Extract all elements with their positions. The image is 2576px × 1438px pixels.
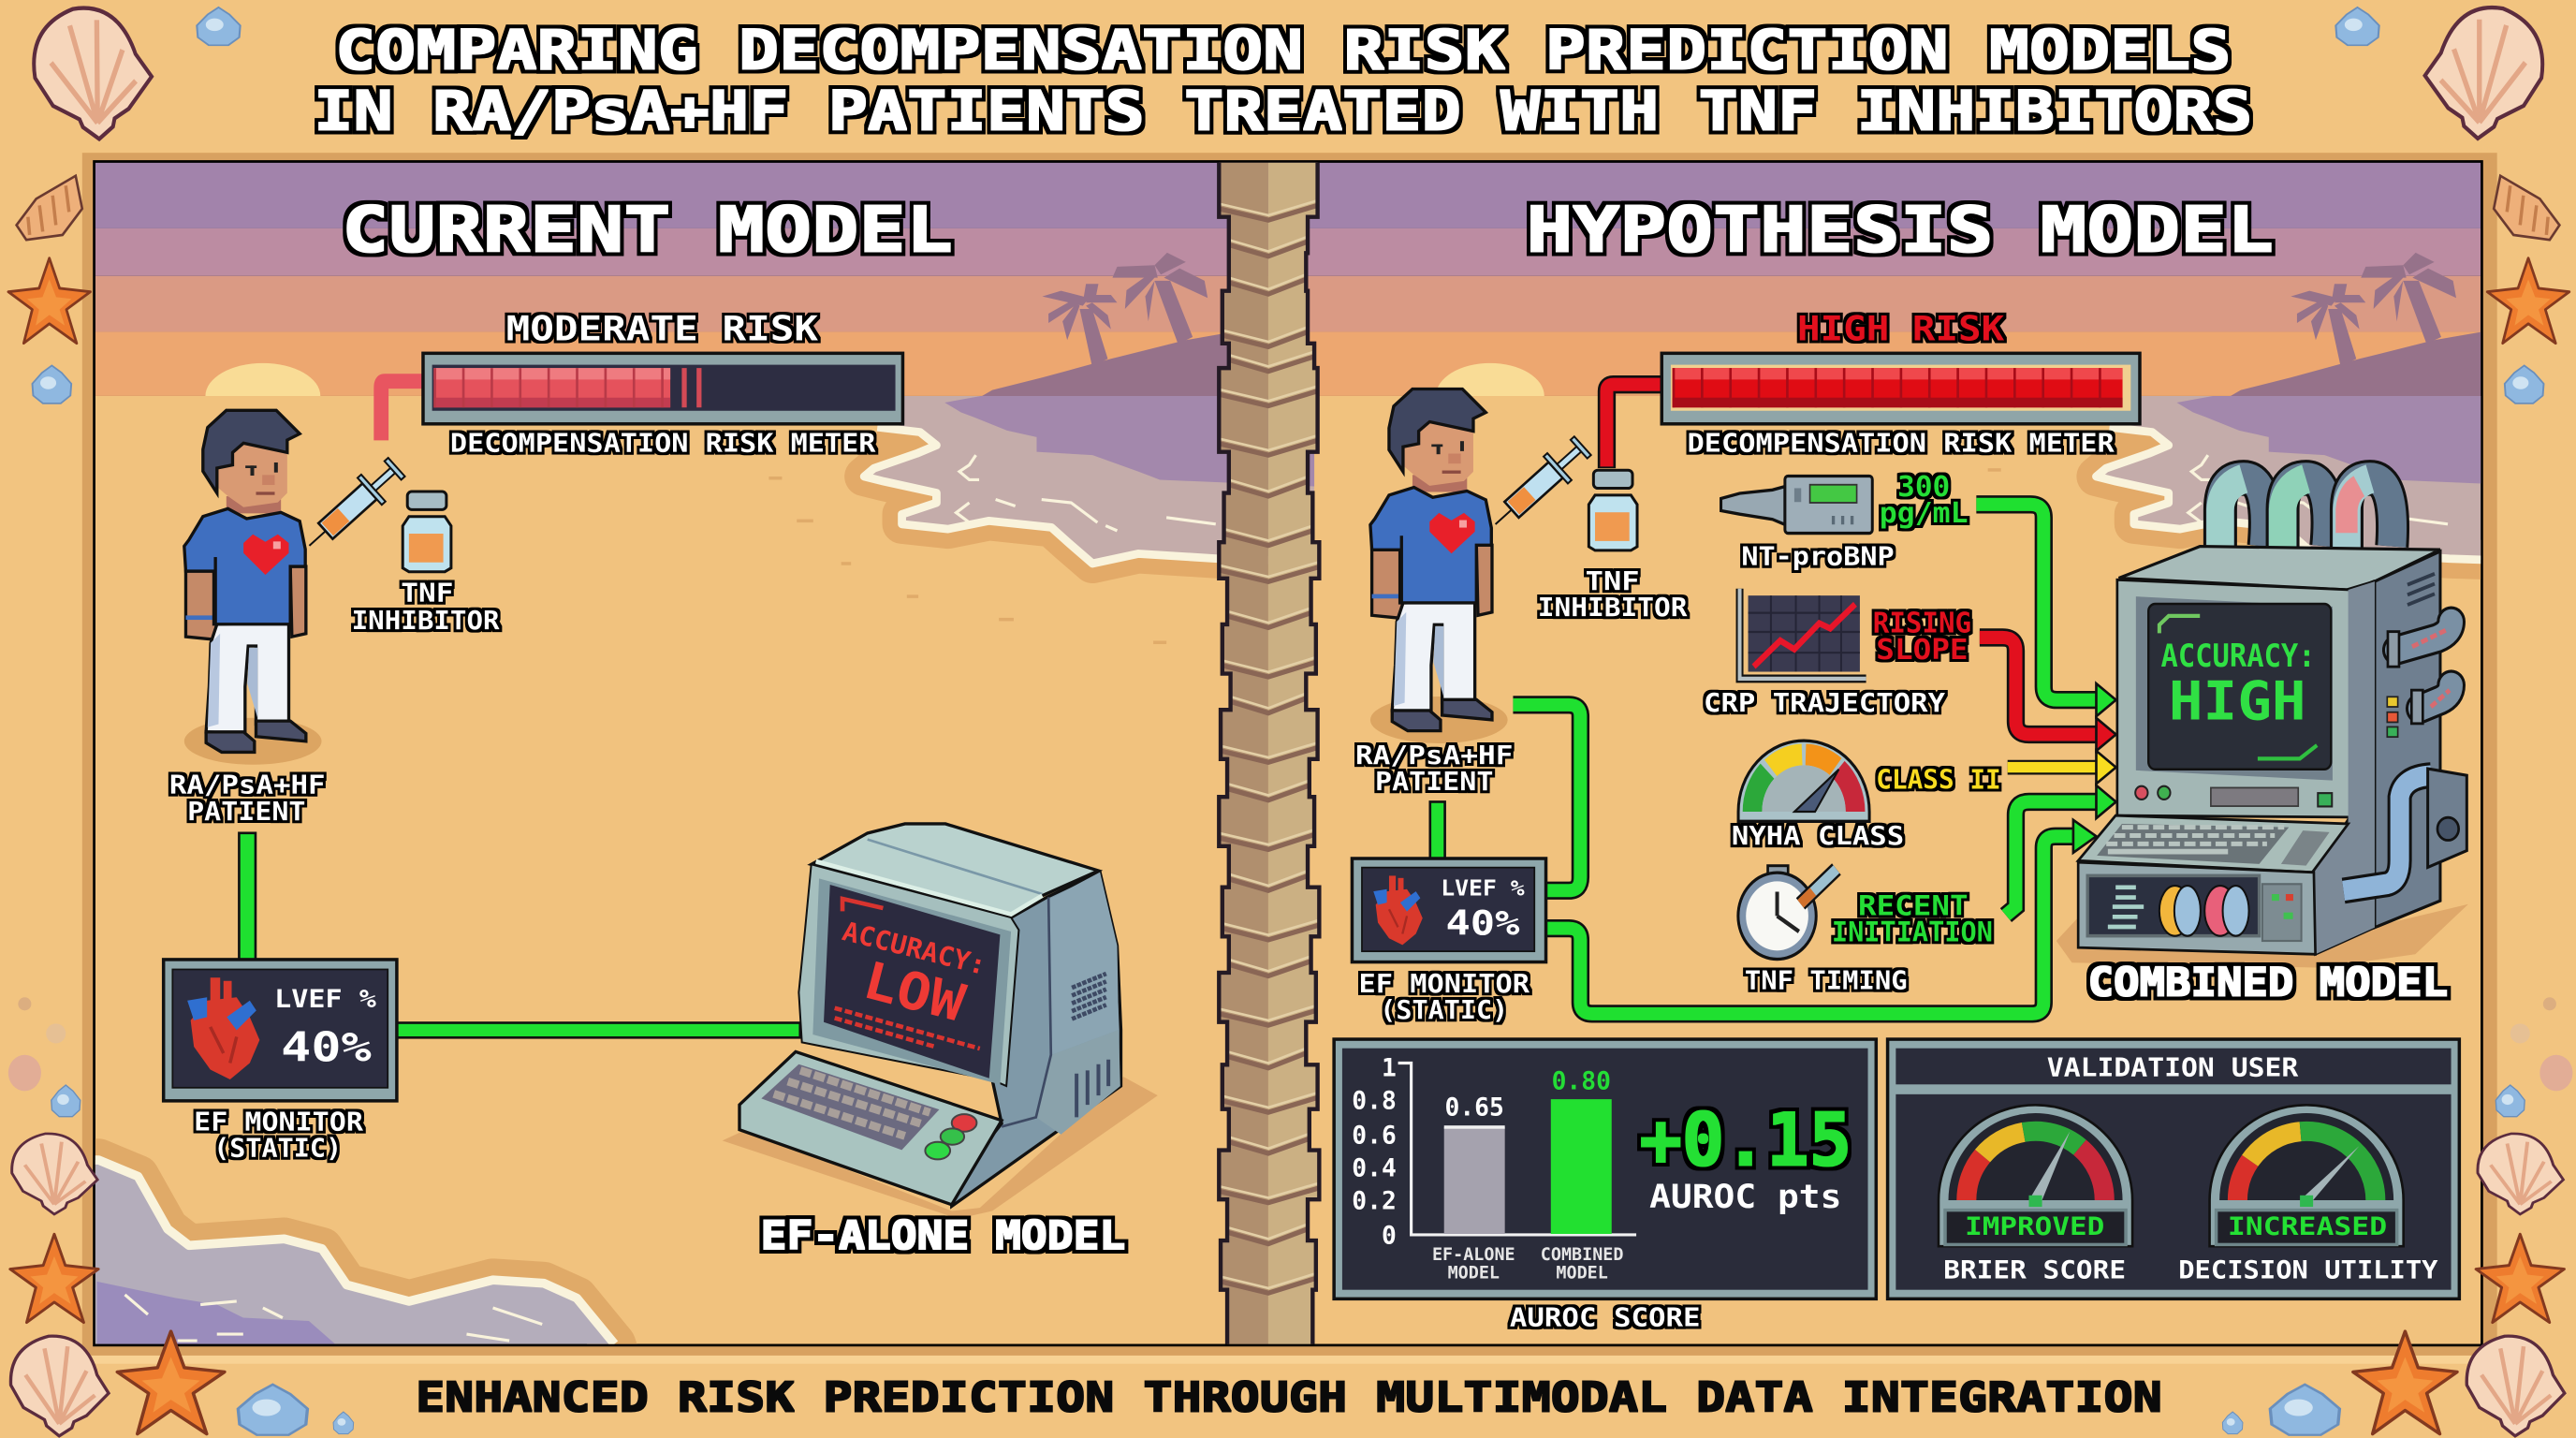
EF monitor: right: 40% [1445, 903, 1519, 944]
gauge: decision utility: INCREASED [2228, 1213, 2387, 1241]
heading: validation user: VALIDATION USER [2047, 1054, 2299, 1083]
value: recent initiation [1832, 890, 1993, 948]
value: rising slope: RISING [1873, 608, 1971, 640]
axis tick labels: 0.6 [1352, 1122, 1397, 1150]
label: left TNF inhibitor [352, 579, 500, 636]
label: right EF monitor caption [1358, 970, 1530, 1025]
axis tick labels [1352, 1055, 1397, 1251]
icon: bottom-right rock [2270, 1385, 2339, 1435]
icon: bottom-left shell [10, 1336, 109, 1436]
icon: lower-left blue bead [51, 1085, 80, 1117]
value: rising slope [1873, 608, 1971, 667]
label: combined model: COMBINED MODEL [2088, 960, 2448, 1005]
label: EF-alone model: EF-ALONE MODEL [761, 1212, 1125, 1258]
icon: lower-right starfish [2476, 1234, 2564, 1323]
connector: right EF monitor to combined model [1546, 820, 2096, 1014]
axis tick labels: 1 [1382, 1055, 1397, 1083]
label: right TNF inhibitor: INHIBITOR [1538, 594, 1688, 623]
value: rising slope: SLOPE [1876, 634, 1969, 667]
gauge: Brier score: IMPROVED [1965, 1213, 2104, 1241]
label: left TNF inhibitor: INHIBITOR [352, 607, 500, 636]
connector: right patient to monitor [1430, 801, 1445, 859]
bar labels: EF-ALONE [1432, 1245, 1515, 1265]
icon: bottom-left rock [238, 1385, 307, 1435]
sun: right [1436, 363, 1544, 396]
icon: left starfish [8, 258, 91, 344]
connector: right patient to combined path [1513, 705, 1580, 890]
bar labels: MODEL [1556, 1263, 1608, 1283]
icon: bottom-right shell [2466, 1336, 2565, 1436]
label: right TNF inhibitor [1538, 567, 1688, 623]
label: TNF timing: TNF TIMING [1745, 967, 1908, 996]
title: COMPARING DECOMPENSATION RISK PREDICTION MODELS [335, 19, 2231, 82]
title: IN RA/PsA+HF PATIENTS TREATED WITH TNF INHIBITORS [314, 80, 2252, 143]
axis tick labels: 0.4 [1352, 1155, 1397, 1183]
icon: top-left scallop shell [28, 1, 157, 145]
water: right shore [2096, 396, 2546, 564]
water: bottom-left corner [82, 1160, 621, 1364]
icon: NT-proBNP device [1721, 477, 1872, 534]
label: AUROC score: AUROC SCORE [1510, 1303, 1701, 1332]
title [314, 19, 2252, 143]
icon: left pebble [32, 365, 71, 404]
heading: hypothesis model: HYPOTHESIS MODEL [1526, 194, 2274, 267]
water: left shore [864, 396, 1314, 564]
axis tick labels: 0.8 [1352, 1088, 1397, 1116]
label: right patient: PATIENT [1375, 768, 1493, 797]
side pipes [2344, 622, 2452, 890]
computer: EF-alone, accuracy low: LOW [857, 950, 972, 1034]
gauge: decision utility [2210, 1105, 2404, 1246]
bar: combined [1551, 1068, 1612, 1234]
label: Brier score: BRIER SCORE [1943, 1256, 2126, 1284]
icon: right conch [2494, 176, 2559, 240]
hoses on top [2220, 477, 2393, 553]
label: left TNF inhibitor: TNF [401, 579, 453, 608]
computer: EF-alone, accuracy low: ACCURACY: [840, 916, 989, 981]
label: left patient [169, 771, 326, 827]
icon: lower-right shell [2478, 1134, 2563, 1214]
arrow: NT-proBNP to combined model [1976, 505, 2116, 716]
panel: AUROC bar chart [1334, 1039, 1876, 1299]
icon: lower-left shell [12, 1134, 97, 1214]
value: recent initiation: INITIATION [1832, 917, 1993, 948]
icon: left conch [17, 176, 82, 240]
label: right EF monitor caption: EF MONITOR [1358, 970, 1530, 999]
label: left patient: RA/PsA+HF [169, 771, 326, 800]
value: NT-proBNP level: pg/mL [1880, 497, 1969, 530]
icon: lower-left starfish [10, 1234, 98, 1323]
connector: left patient to monitor [239, 833, 256, 961]
EF monitor: left: LVEF % [274, 986, 376, 1014]
icon: bottom-right starfish [2353, 1331, 2457, 1434]
callout unit: AUROC pts [1649, 1178, 1841, 1216]
icon: TNF timing stopwatch [1738, 866, 1837, 960]
bar: EF-alone: 0.65 [1445, 1094, 1504, 1123]
biomarker inputs [1704, 471, 2116, 996]
sand specks [768, 468, 2001, 644]
computer: EF-alone, accuracy low [723, 824, 1158, 1219]
label: left patient: PATIENT [187, 798, 305, 827]
panel: validation user [1888, 1039, 2459, 1299]
axis tick labels: 0 [1382, 1223, 1397, 1251]
label: NT-proBNP: NT-proBNP [1741, 543, 1895, 572]
label: right patient [1355, 741, 1513, 797]
bar: combined: 0.80 [1552, 1068, 1611, 1096]
icon: top-left blue pebble [197, 7, 241, 45]
icon: top-right scallop shell [2420, 0, 2548, 145]
connector: right meter to vial [1606, 385, 1661, 468]
value: NT-proBNP level [1880, 471, 1969, 530]
patient figure with syringe and vial: right [1370, 389, 1637, 743]
value: class II: CLASS II [1876, 764, 2001, 795]
risk meter: moderate [423, 353, 902, 424]
divider: stone column [1219, 163, 1319, 1344]
EF monitor: right [1352, 858, 1546, 962]
label: decision utility: DECISION UTILITY [2178, 1256, 2438, 1284]
icon: NYHA class gauge [1738, 741, 1869, 821]
label: left EF monitor caption [194, 1108, 364, 1164]
icon: lower-right beads [2510, 997, 2572, 1091]
connector fill: right meter line [1606, 385, 1661, 466]
arrow: CRP to combined model [1980, 638, 2116, 751]
computer: combined model, accuracy high: ACCURACY: [2161, 638, 2316, 674]
label: left EF monitor caption: (STATIC) [213, 1135, 342, 1164]
EF monitor: left: 40% [281, 1024, 372, 1072]
icon: right starfish [2487, 258, 2569, 344]
label: left meter caption: DECOMPENSATION RISK METER [450, 430, 876, 459]
island and palms: left [981, 253, 1249, 396]
label: high risk: HIGH RISK [1797, 308, 2005, 348]
gauge: Brier score [1939, 1105, 2132, 1246]
icon: lower-left beads [8, 997, 66, 1091]
connector: left monitor to computer [396, 1023, 800, 1037]
icon: lower-right blue bead [2496, 1085, 2525, 1117]
label: right TNF inhibitor: TNF [1586, 567, 1640, 596]
arrow: TNF timing to combined model [2006, 785, 2116, 916]
axis tick labels: 0.2 [1352, 1188, 1397, 1216]
EF monitor: right: LVEF % [1441, 876, 1525, 901]
chart axes [1398, 1064, 1636, 1235]
icon: bottom-left starfish [117, 1331, 225, 1434]
footer caption: ENHANCED RISK PREDICTION THROUGH MULTIMODAL DATA INTEGRATION [416, 1374, 2162, 1422]
icon: CRP trajectory chart [1740, 589, 1866, 679]
value: recent initiation: RECENT [1858, 890, 1969, 922]
label: right meter caption: DECOMPENSATION RISK METER [1687, 430, 2115, 459]
label: NYHA class: NYHA CLASS [1732, 822, 1904, 851]
patient figure with syringe and vial: left [184, 410, 451, 765]
bar labels: COMBINED [1541, 1245, 1623, 1265]
connector: left meter to syringe [381, 381, 422, 440]
label: moderate risk: MODERATE RISK [506, 308, 819, 348]
icon: right pebble [2505, 365, 2544, 404]
island and palms: right [2230, 253, 2496, 396]
arrow: NYHA to combined model [2008, 751, 2116, 784]
icon: bottom-right droplet [2222, 1412, 2243, 1434]
computer: combined model, accuracy high: HIGH [2169, 671, 2306, 733]
label: left EF monitor caption: EF MONITOR [194, 1108, 364, 1137]
icon: anatomical heart left [187, 977, 259, 1079]
icon: bottom-left droplet [333, 1412, 354, 1434]
risk meter: high [1661, 353, 2140, 424]
sun: left [205, 363, 320, 396]
label: right patient: RA/PsA+HF [1355, 741, 1513, 770]
bar labels [1432, 1245, 1623, 1283]
icon: anatomical heart right [1373, 875, 1423, 945]
EF monitor: left [164, 960, 397, 1101]
bar labels: MODEL [1448, 1263, 1500, 1283]
callout: AUROC gain: +0.15 [1640, 1098, 1852, 1182]
computer: combined model, accuracy high [2056, 477, 2468, 968]
value: NT-proBNP level: 300 [1897, 471, 1950, 504]
bar: EF-alone [1444, 1094, 1505, 1234]
label: right EF monitor caption: (STATIC) [1380, 996, 1508, 1025]
icon: top-right blue pebble [2335, 7, 2379, 45]
heading: current model: CURRENT MODEL [342, 194, 953, 267]
label: CRP trajectory: CRP TRAJECTORY [1704, 689, 1946, 718]
